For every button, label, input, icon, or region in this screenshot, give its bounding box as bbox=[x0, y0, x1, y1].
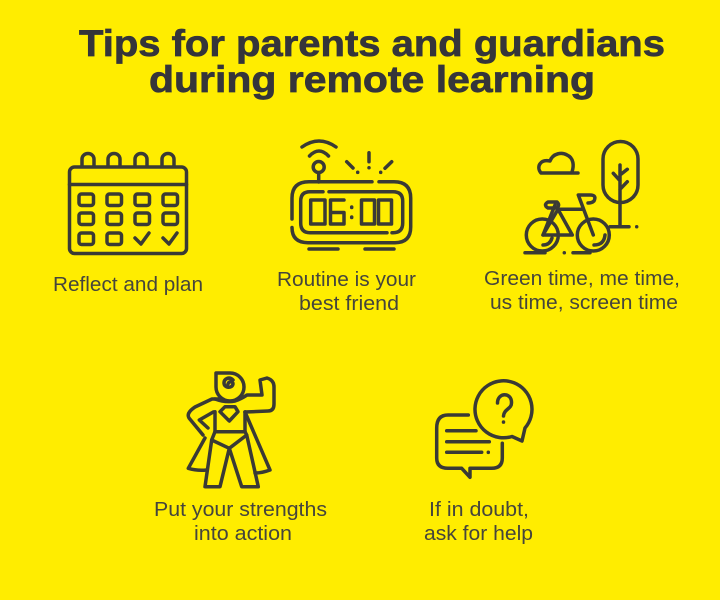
label: green time: Green time, me time, bbox=[484, 268, 680, 290]
panel: reflect and plan bbox=[53, 154, 203, 296]
icon: calendar bbox=[70, 154, 186, 254]
icon: bicycle, tree and cloud bbox=[525, 142, 638, 253]
label: strengths: Put your strengths bbox=[154, 499, 327, 521]
label: ask for help bbox=[424, 499, 533, 545]
icon: alarm clock bbox=[292, 141, 411, 249]
label: reflect and plan: Reflect and plan bbox=[53, 274, 203, 296]
label: green time: us time, screen time bbox=[490, 292, 678, 314]
title: Tips for parents and guardians bbox=[79, 23, 665, 64]
label: ask for help: ask for help bbox=[424, 523, 533, 545]
label: routine: Routine is your bbox=[277, 269, 416, 291]
label: green time bbox=[484, 268, 680, 314]
label: routine bbox=[277, 269, 416, 315]
label: strengths bbox=[154, 499, 327, 545]
label: routine: best friend bbox=[299, 293, 399, 315]
label: ask for help: If in doubt, bbox=[429, 499, 529, 521]
panel: green time bbox=[484, 142, 680, 314]
icon: speech bubbles bbox=[437, 381, 532, 477]
label: strengths: into action bbox=[194, 523, 292, 545]
icon: superhero bbox=[188, 373, 274, 487]
title: during remote learning bbox=[149, 59, 595, 100]
title bbox=[79, 23, 665, 100]
panel: strengths bbox=[154, 373, 327, 545]
panel: routine bbox=[277, 141, 416, 315]
panel: ask for help bbox=[424, 381, 533, 545]
